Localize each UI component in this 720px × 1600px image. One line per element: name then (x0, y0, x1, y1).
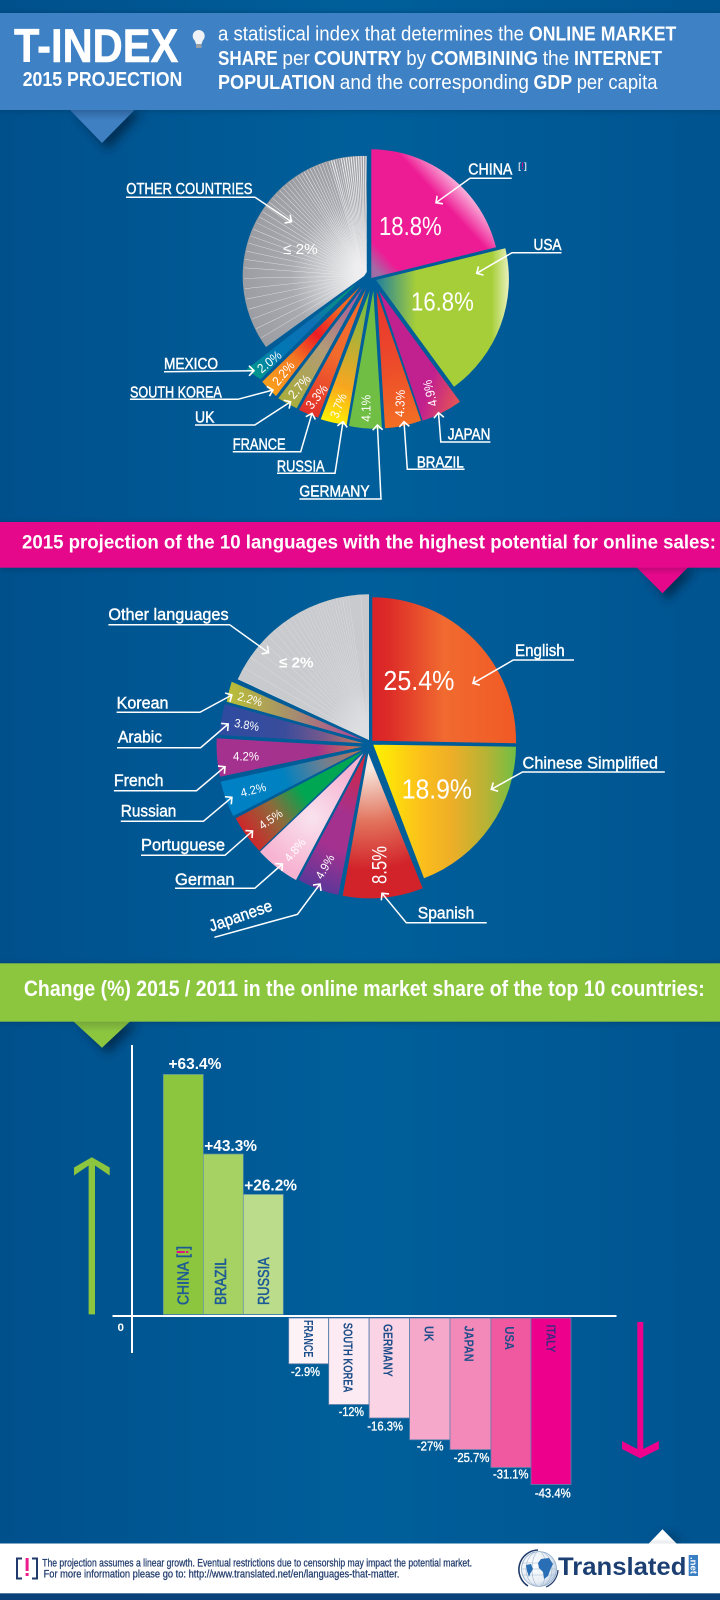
label: France (233, 413, 312, 454)
slice values: small slices: 4.2% (239, 780, 268, 800)
axis zero label: 0 (118, 1322, 124, 1334)
slice: German (260, 753, 363, 880)
slice values: small slices (254, 347, 441, 422)
heading band: change (0, 962, 720, 1054)
label: other countries (126, 181, 292, 222)
slice: France (299, 289, 366, 418)
footnote text (42, 1558, 472, 1580)
values: decline (291, 1364, 571, 1501)
slice: Arabic (219, 704, 363, 743)
label: German (175, 864, 282, 889)
bar labels: decline: USA (502, 1326, 517, 1351)
definition text: per capita (577, 71, 658, 94)
slice values: small slices: 3.8% (233, 716, 261, 734)
values: decline: -16.3% (367, 1419, 403, 1434)
slice: Japanese (299, 753, 366, 895)
values: decline: -27% (417, 1439, 444, 1454)
label: France: FRANCE (233, 437, 286, 454)
slice values: small slices: 2.2% (236, 689, 264, 709)
label: Russia: RUSSIA (277, 458, 325, 475)
label: Korean (117, 695, 232, 713)
bar labels: growth (175, 1246, 273, 1305)
label: Portuguese (141, 831, 252, 855)
footnote text: For more information please go to: http://www.translated.net/en/languages-that-matter. (44, 1568, 399, 1580)
slice values: small slices: 4.2% (233, 750, 259, 764)
label: China: [!] (518, 161, 527, 171)
slice: China (371, 149, 496, 278)
label: Arabic (117, 724, 228, 748)
title: T-INDEX: T-INDEX (14, 19, 178, 72)
label: Japanese (207, 884, 320, 937)
slice: UK (278, 288, 362, 408)
slice values: small slices: 4.1% (358, 394, 374, 422)
definition text: and the corresponding (340, 71, 529, 94)
icon: note marker (17, 1558, 37, 1578)
definition text: COMBINING (431, 47, 538, 70)
chart: language potential pie (108, 594, 665, 937)
slice: Russia (321, 291, 370, 425)
label: South Korea: SOUTH KOREA (130, 384, 222, 401)
label: German: German (175, 871, 235, 889)
definition text (218, 23, 677, 94)
pointer triangle: green (74, 1022, 138, 1054)
definition text: the (543, 47, 569, 70)
definition text: ONLINE MARKET (529, 23, 677, 46)
bar labels: growth: BRAZIL (213, 1258, 230, 1305)
label: USA (477, 237, 562, 273)
definition text: INTERNET (574, 47, 662, 70)
slice values: small slices: 4.5% (256, 806, 286, 832)
label: China: CHINA (468, 161, 513, 178)
header pointer triangle (70, 110, 142, 150)
logo: Translated (519, 1550, 698, 1587)
bars: growth (163, 1074, 283, 1314)
label: Brazil (404, 422, 465, 471)
values: growth: +63.4% (168, 1056, 221, 1073)
bar labels: decline: SOUTH KOREA (340, 1323, 355, 1393)
label: Brazil: BRAZIL (417, 454, 464, 471)
bar labels: growth: CHINA (175, 1261, 192, 1305)
definition text: GDP (534, 71, 572, 94)
slice: South Korea (262, 287, 360, 396)
label: Russia (277, 422, 343, 475)
label: Spanish: Spanish (418, 904, 474, 922)
label: Japan (438, 413, 490, 443)
label: Russian: Russian (121, 803, 176, 821)
label: UK: UK (195, 409, 215, 426)
slice: Chinese Simplified (373, 745, 516, 878)
subtitle: 2015 projection: 2015 PROJECTION (23, 69, 182, 91)
label: Japan: JAPAN (448, 426, 490, 443)
slice: Brazil (377, 292, 421, 428)
slice: other languages (238, 594, 369, 740)
values: growth: +26.2% (244, 1177, 297, 1194)
label: Germany: GERMANY (299, 483, 370, 500)
arrow: growth up (74, 1157, 110, 1314)
label: English (473, 642, 574, 683)
slice: Korean (227, 682, 363, 740)
label: UK (195, 402, 291, 426)
slice: Mexico (247, 284, 356, 379)
bar labels: growth: [!] (175, 1246, 192, 1258)
label: French (114, 767, 225, 791)
slice values: small slices: 4.3% (392, 389, 408, 417)
slice: Russian (221, 750, 362, 816)
label: Chinese Simplified (491, 754, 665, 789)
slice: Germany (349, 291, 382, 429)
pointer triangle: magenta (637, 568, 696, 600)
definition text: by (406, 47, 427, 70)
label: other countries: OTHER COUNTRIES (126, 181, 252, 198)
label: Mexico: MEXICO (164, 356, 218, 373)
chart: change bar chart (74, 1045, 659, 1501)
bars: decline (289, 1318, 571, 1484)
footer pointer triangle (648, 1529, 686, 1544)
label: other languages: Other languages (108, 606, 229, 624)
label: Korean: Korean (117, 695, 168, 713)
bar labels: decline (301, 1320, 558, 1393)
label: Spanish (382, 893, 487, 923)
slice values: small slices (233, 689, 338, 881)
bar labels: growth: RUSSIA (256, 1257, 273, 1305)
definition text: a statistical index that determines the (218, 23, 524, 46)
values: decline: -43.4% (535, 1486, 571, 1501)
slice value: other languages: ≤ 2% (279, 654, 314, 671)
footnote text: The projection assumes a linear growth. Eventual restrictions due to censorship may impact the potential market. (42, 1558, 472, 1570)
slice: French (217, 738, 362, 777)
logo badge .net: .net (688, 1557, 698, 1574)
heading band: languages (0, 521, 720, 600)
slice value: China: 18.8% (379, 211, 442, 241)
definition text: COUNTRY (314, 47, 402, 70)
slice values: small slices: 2.7% (285, 371, 314, 402)
slice: Portuguese (236, 752, 362, 851)
slice values: small slices: 2.0% (254, 347, 285, 376)
slice value: English: 25.4% (383, 665, 454, 696)
slice: English (372, 597, 516, 743)
slice: Spanish (343, 753, 423, 898)
definition text: per (282, 47, 310, 70)
label: Mexico (164, 356, 254, 373)
values: decline: -25.7% (454, 1450, 490, 1465)
label: English: English (515, 642, 565, 660)
slice values: small slices: 4.9% (312, 852, 338, 881)
label: Portuguese: Portuguese (141, 837, 225, 855)
slice value: other countries: ≤ 2% (283, 241, 318, 258)
slice value: USA: 16.8% (411, 287, 474, 317)
label: USA: USA (534, 237, 562, 254)
footer (0, 1529, 720, 1600)
values: decline: -2.9% (291, 1364, 320, 1379)
slice value: Spanish: 8.5% (368, 846, 392, 884)
logo wordmark: Translated (558, 1553, 686, 1581)
slice: Japan (379, 291, 460, 421)
icon: light bulb (193, 30, 205, 48)
header band (0, 12, 720, 150)
slice values: small slices: 4.8% (281, 835, 309, 864)
values: decline: -12% (339, 1404, 364, 1419)
label: Chinese Simplified: Chinese Simplified (522, 754, 658, 772)
arrow: decline down (622, 1322, 659, 1458)
label: other languages (108, 606, 269, 653)
slice: other countries (242, 156, 367, 347)
bar labels: decline: ITALY (543, 1324, 558, 1353)
slice values: small slices: 2.2% (269, 358, 298, 388)
values: decline: -31.1% (493, 1467, 529, 1482)
bar labels: decline: JAPAN (462, 1326, 477, 1362)
label: French: French (114, 772, 164, 790)
slice value: Chinese Simplified: 18.9% (402, 773, 472, 804)
definition text: SHARE (218, 47, 278, 70)
slice values: small slices: 4.9% (419, 378, 441, 408)
label: Japanese: Japanese (207, 897, 275, 935)
slice values: small slices: 3.3% (302, 381, 331, 412)
bar labels: decline: UK (422, 1326, 437, 1342)
icon: globe (519, 1550, 558, 1587)
definition text: POPULATION (218, 71, 335, 94)
label: Russian (121, 797, 232, 821)
axes (112, 1045, 616, 1353)
slice: USA (376, 248, 509, 387)
values: growth (168, 1056, 297, 1194)
label: Arabic: Arabic (118, 729, 162, 747)
slice values: small slices: 3.7% (327, 391, 350, 420)
label: China (436, 161, 527, 203)
chart: online market share by country pie (126, 149, 562, 500)
values: growth: +43.3% (204, 1138, 257, 1155)
bar labels: decline: GERMANY (380, 1324, 395, 1377)
bar labels: decline: FRANCE (301, 1320, 316, 1358)
label: Germany (299, 425, 381, 500)
